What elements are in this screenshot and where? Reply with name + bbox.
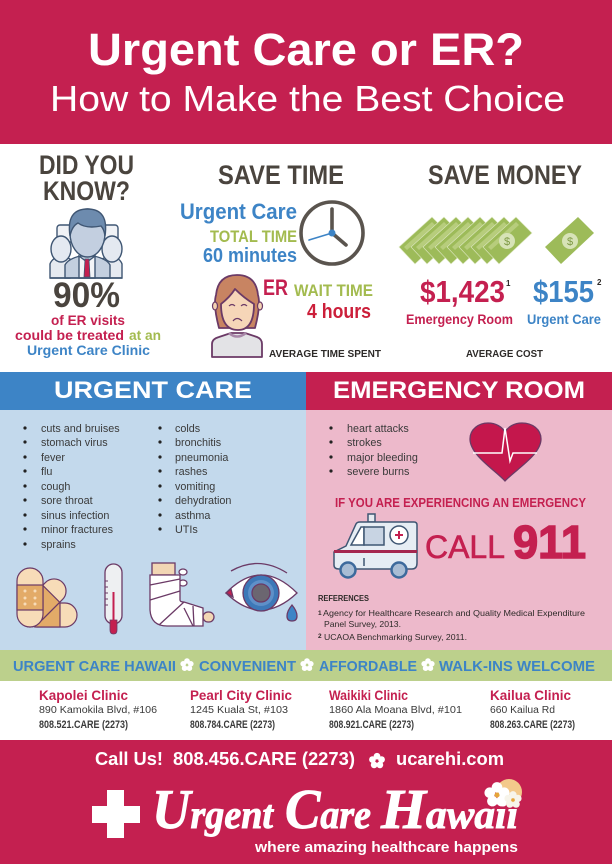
list: urgent care conditions 2: rashes bbox=[175, 466, 208, 478]
icon: ambulance bbox=[334, 514, 417, 578]
banner: benefits strip: WALK-INS WELCOME bbox=[439, 658, 595, 675]
clinic: kailua: Kailua Clinic bbox=[490, 688, 571, 703]
tagline: where amazing healthcare happens bbox=[254, 839, 518, 856]
caption: average cost: AVERAGE COST bbox=[466, 349, 543, 360]
clinic: kapolei: 890 Kamokila Blvd, #106 bbox=[39, 705, 157, 716]
list: urgent care conditions 2: colds bbox=[175, 423, 201, 435]
text: of ER visits: at an bbox=[129, 327, 161, 343]
heading: urgent care: URGENT CARE bbox=[54, 377, 252, 404]
panel: emergency room bbox=[306, 372, 612, 650]
clinic: pearl city: 808.784.CARE (2273) bbox=[190, 719, 275, 731]
list: emergency conditions: strokes bbox=[347, 437, 382, 449]
list: urgent care conditions 1: sore throat bbox=[41, 495, 93, 507]
list: emergency conditions bbox=[329, 423, 418, 478]
clinic: pearl city: 1245 Kuala St, #103 bbox=[190, 705, 288, 716]
text: er wait time bbox=[263, 275, 373, 323]
icon: thermometer bbox=[105, 564, 122, 634]
contact line: Call Us! bbox=[95, 749, 163, 769]
clinic: waikiki: Waikiki Clinic bbox=[329, 688, 408, 703]
cost: urgent care: $155 bbox=[533, 274, 594, 309]
references: 2 bbox=[318, 633, 322, 640]
heading: emergency room: EMERGENCY ROOM bbox=[333, 377, 585, 404]
panel: save time bbox=[180, 160, 381, 360]
heading: save time: SAVE TIME bbox=[218, 160, 344, 190]
contact line bbox=[95, 749, 504, 769]
text: of ER visits: of ER visits bbox=[51, 312, 125, 328]
icon: leg cast bbox=[150, 563, 214, 626]
banner: benefits strip: AFFORDABLE bbox=[319, 658, 417, 675]
text: call 911 bbox=[425, 516, 586, 568]
text: call 911: 911 bbox=[513, 516, 586, 568]
clinic: kailua: 808.263.CARE (2273) bbox=[490, 719, 575, 731]
clinic: pearl city: Pearl City Clinic bbox=[190, 688, 292, 703]
clinic: kailua bbox=[490, 688, 575, 731]
text: if you are experiencing: IF YOU ARE EXPERIENCING AN EMERGENCY bbox=[335, 496, 587, 510]
text: er wait time: WAIT TIME bbox=[294, 281, 373, 300]
list: urgent care conditions 1: sinus infection bbox=[41, 510, 109, 522]
footer bbox=[0, 740, 612, 864]
logo: script wordmark: Urgent bbox=[152, 779, 275, 841]
list: urgent care conditions 2: pneumonia bbox=[175, 452, 228, 464]
clinic: kapolei: 808.521.CARE (2273) bbox=[39, 719, 128, 731]
list: urgent care conditions 1: cough bbox=[41, 481, 70, 493]
list: urgent care conditions 1: cuts and bruises bbox=[41, 423, 120, 435]
text: urgent care total time: TOTAL TIME bbox=[210, 227, 297, 246]
list: urgent care conditions 1: minor fractures bbox=[41, 524, 114, 536]
cost: emergency room: 1 bbox=[506, 279, 511, 288]
panel: did you know bbox=[15, 150, 161, 358]
text: urgent care total time bbox=[180, 199, 297, 267]
references: REFERENCES bbox=[318, 594, 370, 603]
logo: script wordmark: Hawaii bbox=[380, 779, 518, 841]
icon: clock bbox=[301, 202, 363, 264]
cost: urgent care bbox=[527, 274, 602, 327]
logo: white cross bbox=[92, 790, 140, 838]
logo: flowers bbox=[484, 779, 522, 808]
references bbox=[318, 594, 585, 642]
text: of ER visits: Urgent Care Clinic bbox=[27, 342, 150, 358]
text: of ER visits bbox=[15, 312, 161, 358]
text: er wait time: 4 hours bbox=[307, 301, 371, 323]
list: urgent care conditions 1 bbox=[23, 423, 120, 551]
clinic: pearl city bbox=[190, 688, 292, 731]
list: urgent care conditions 1: sprains bbox=[41, 539, 76, 551]
references: Panel Survey, 2013. bbox=[324, 619, 401, 629]
contact line: ucarehi.com bbox=[396, 749, 504, 769]
icon: stack of bills bbox=[399, 217, 532, 264]
list: urgent care conditions 2: vomiting bbox=[175, 481, 215, 493]
icon: heart with pulse bbox=[470, 423, 541, 481]
banner: benefits strip: CONVENIENT bbox=[199, 658, 296, 675]
list: emergency conditions: severe burns bbox=[347, 466, 410, 478]
header banner bbox=[0, 0, 612, 144]
clinic: waikiki: 808.921.CARE (2273) bbox=[329, 719, 414, 731]
banner: benefits strip: URGENT CARE HAWAII bbox=[13, 658, 176, 675]
references: Agency for Healthcare Research and Quality Medical Expenditure bbox=[323, 608, 585, 618]
list: urgent care conditions 2: UTIs bbox=[175, 524, 198, 536]
clinic: kapolei bbox=[39, 688, 157, 731]
icon: teary eye bbox=[226, 563, 297, 621]
logo: script wordmark: Care bbox=[285, 779, 371, 841]
list: urgent care conditions 1: fever bbox=[41, 452, 65, 464]
clinic: kailua: 660 Kailua Rd bbox=[490, 705, 555, 716]
text: urgent care total time: Urgent Care bbox=[180, 199, 297, 224]
cost: urgent care: Urgent Care bbox=[527, 312, 601, 327]
text: of ER visits: could be treated bbox=[15, 327, 124, 343]
list: urgent care conditions 2: asthma bbox=[175, 510, 210, 522]
panel: urgent care bbox=[0, 372, 306, 650]
contact line: 808.456.CARE (2273) bbox=[173, 749, 355, 769]
references: UCAOA Benchmarking Survey, 2011. bbox=[324, 632, 467, 642]
text: call 911: CALL bbox=[425, 529, 505, 565]
icon: single bill bbox=[545, 217, 594, 264]
panel: save money bbox=[399, 160, 602, 360]
cost: emergency room: Emergency Room bbox=[406, 312, 513, 327]
panel: clinics bbox=[0, 681, 612, 740]
heading: did you know: DID YOU bbox=[39, 150, 134, 180]
list: urgent care conditions 2 bbox=[158, 423, 231, 536]
references: 1 bbox=[318, 610, 322, 617]
list: emergency conditions: major bleeding bbox=[347, 452, 418, 464]
list: emergency conditions: heart attacks bbox=[347, 423, 409, 435]
clinic: waikiki: 1860 Ala Moana Blvd, #101 bbox=[329, 705, 462, 716]
cost: emergency room: $1,423 bbox=[420, 274, 505, 309]
icon: stack of bills: $ bbox=[504, 236, 510, 248]
icon: doctors group bbox=[50, 209, 122, 278]
heading: save money: SAVE MONEY bbox=[428, 160, 582, 190]
icon: worried woman bbox=[212, 275, 262, 357]
banner: benefits strip bbox=[0, 650, 612, 681]
statistic: 90%: 90% bbox=[53, 276, 120, 315]
heading: did you know: KNOW? bbox=[43, 176, 130, 206]
logo: script wordmark bbox=[152, 779, 518, 841]
list: urgent care conditions 2: bronchitis bbox=[175, 437, 222, 449]
text: er wait time: ER bbox=[263, 275, 288, 300]
caption: average time spent: AVERAGE TIME SPENT bbox=[269, 349, 381, 360]
cost: urgent care: 2 bbox=[597, 278, 602, 287]
cost: emergency room bbox=[406, 274, 513, 327]
list: urgent care conditions 1: flu bbox=[41, 466, 52, 478]
icon: bandages bbox=[13, 568, 77, 632]
clinic: waikiki bbox=[329, 688, 462, 731]
title: Urgent Care or ER? bbox=[88, 24, 524, 75]
subtitle: How to Make the Best Choice bbox=[50, 78, 565, 119]
list: urgent care conditions 2: dehydration bbox=[175, 495, 231, 507]
icon: single bill: $ bbox=[567, 236, 573, 248]
clinic: kapolei: Kapolei Clinic bbox=[39, 688, 128, 703]
list: urgent care conditions 1: stomach virus bbox=[41, 437, 108, 449]
text: urgent care total time: 60 minutes bbox=[203, 245, 297, 267]
